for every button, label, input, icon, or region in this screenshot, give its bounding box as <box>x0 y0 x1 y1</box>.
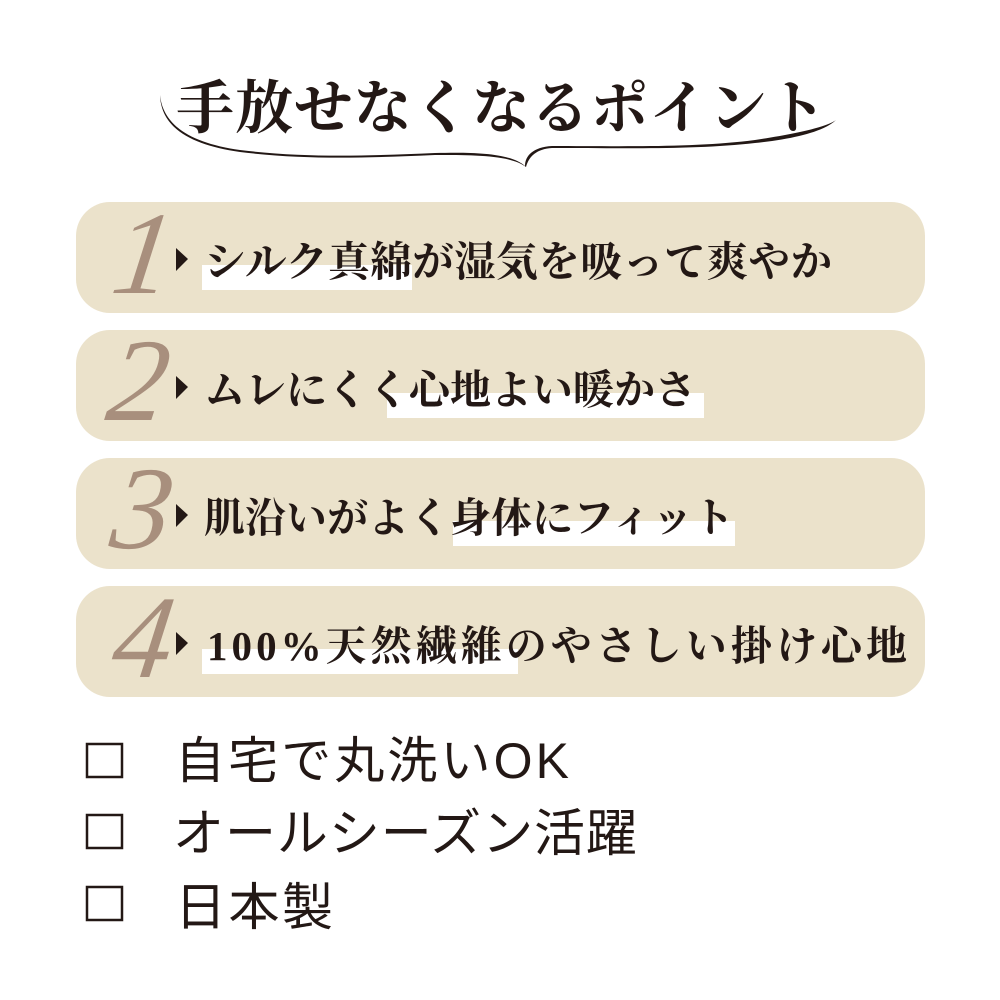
number 1: 1 <box>105 188 183 319</box>
text 3: 肌沿いがよく身体にフィット <box>204 495 734 541</box>
text 1: シルク真綿が湿気を吸って爽やか <box>204 239 832 285</box>
number 3: 3 <box>103 443 182 574</box>
arrow 3 <box>176 504 188 527</box>
text 2: ムレにくく心地よい暖かさ <box>204 367 696 413</box>
title: 手放せなくなるポイント <box>176 76 826 141</box>
number 2: 2 <box>100 315 178 446</box>
panel: point 4 <box>76 572 925 703</box>
arrow 2 <box>176 376 188 399</box>
arrow 4 <box>176 632 188 655</box>
panel: point 2 <box>76 315 925 446</box>
item: home washable: 自宅で丸洗いOK <box>175 733 569 789</box>
title flourish <box>160 95 836 167</box>
item: all season: オールシーズン活躍 <box>173 805 637 862</box>
highlight 3 <box>453 521 735 546</box>
checklist <box>87 733 637 936</box>
number 4: 4 <box>105 572 183 703</box>
panel: point 3 <box>76 443 925 574</box>
item: made in Japan <box>87 879 333 936</box>
highlight 4 <box>202 649 518 674</box>
highlight 1 <box>202 265 412 290</box>
panel: point 1 <box>76 188 925 319</box>
arrow 1 <box>176 248 188 271</box>
highlight 2 <box>387 393 704 418</box>
text 4: 100%天然繊維のやさしい掛け心地 <box>207 623 907 669</box>
item: made in Japan: 日本製 <box>175 879 333 936</box>
